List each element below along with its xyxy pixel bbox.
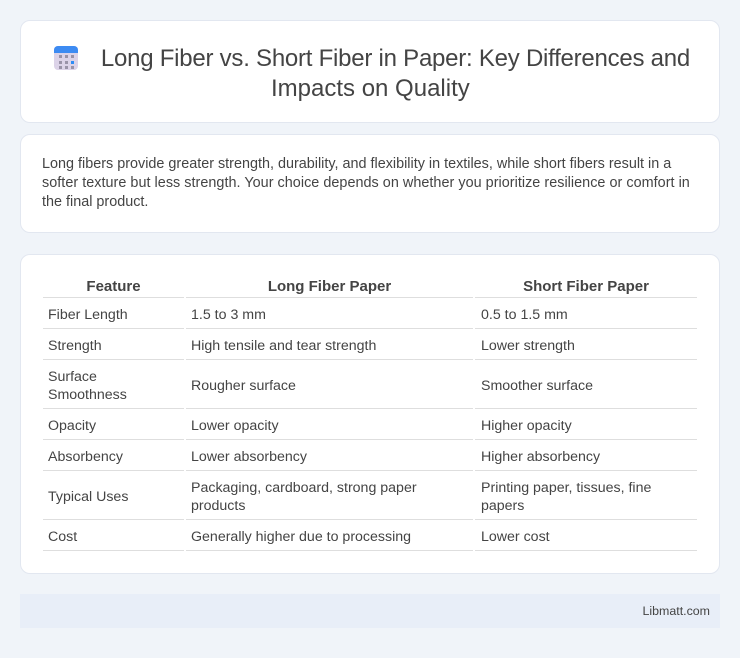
- row: strength: Strength: [48, 338, 102, 354]
- row: absorbency: Absorbency: [48, 449, 123, 465]
- table header: Long Fiber Paper: [268, 278, 391, 295]
- row: opacity: Higher opacity: [481, 418, 572, 434]
- panel: comparison table card: [20, 254, 720, 574]
- row: fiber length: Fiber Length: [48, 307, 128, 323]
- table: comparison: [43, 278, 697, 551]
- row: absorbency: Lower absorbency: [191, 449, 307, 465]
- row: opacity: Lower opacity: [191, 418, 279, 434]
- table header: [86, 278, 649, 295]
- row: surface smoothness: Surface: [48, 369, 97, 385]
- row: surface smoothness: Rougher surface: [191, 378, 296, 394]
- row: surface smoothness: Smoother surface: [481, 378, 593, 394]
- text block: summary: Long fibers provide greater strength, durability, and flexibility in textiles, while short fibers result in a: [42, 156, 671, 172]
- text block: summary: the final product.: [42, 194, 148, 210]
- row: strength: High tensile and tear strength: [191, 338, 376, 354]
- row: typical uses: products: [191, 498, 245, 514]
- row: cost: [48, 529, 550, 545]
- title: [101, 45, 690, 102]
- panel: summary card: [20, 134, 720, 233]
- row: fiber length: [48, 307, 568, 323]
- row: strength: [48, 338, 575, 354]
- row: opacity: Opacity: [48, 418, 96, 434]
- row: surface smoothness: [48, 369, 593, 403]
- title: Long Fiber vs. Short Fiber in Paper: Key Differences and: [101, 45, 690, 72]
- row: cost: Generally higher due to processing: [191, 529, 411, 545]
- row: absorbency: Higher absorbency: [481, 449, 600, 465]
- table header: Short Fiber Paper: [523, 278, 649, 295]
- text block: summary: softer texture but less strength. Your choice depends on whether you prioritize resilience or comfort in: [42, 175, 690, 191]
- row: surface smoothness: Smoothness: [48, 387, 127, 403]
- table header: Feature: [86, 278, 141, 295]
- row: cost: Cost: [48, 529, 77, 545]
- footer text: Libmatt.com: [643, 604, 710, 618]
- row: typical uses: Typical Uses: [48, 489, 128, 505]
- row: fiber length: 0.5 to 1.5 mm: [481, 307, 568, 323]
- footer: [20, 594, 720, 628]
- panel: title card: [20, 20, 720, 123]
- row: opacity: [48, 418, 572, 434]
- row: typical uses: [48, 480, 651, 514]
- row: typical uses: Printing paper, tissues, fine: [481, 480, 651, 496]
- row: typical uses: Packaging, cardboard, strong paper: [191, 480, 417, 496]
- row: typical uses: papers: [481, 498, 524, 514]
- row: cost: Lower cost: [481, 529, 550, 545]
- icon: calendar: [54, 46, 78, 70]
- row: absorbency: [48, 449, 600, 465]
- row: fiber length: 1.5 to 3 mm: [191, 307, 266, 323]
- row: strength: Lower strength: [481, 338, 575, 354]
- title: Impacts on Quality: [271, 75, 470, 102]
- text block: summary: [42, 156, 690, 210]
